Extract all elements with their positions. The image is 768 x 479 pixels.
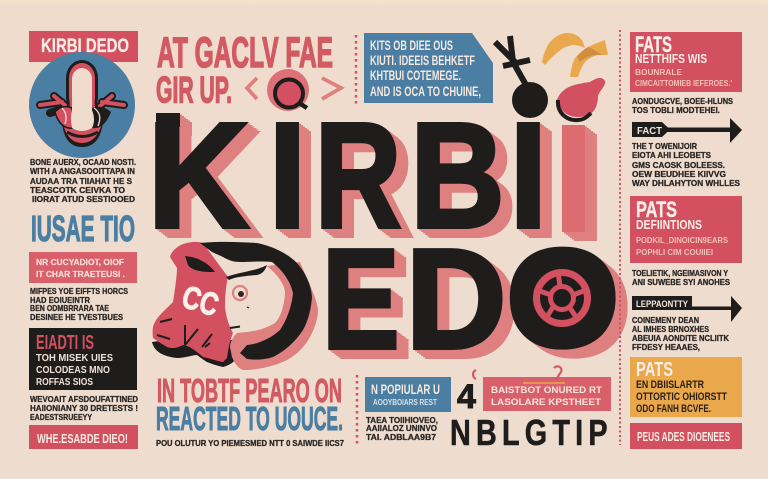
big title: KIRBI DEDO letters: B [410, 91, 504, 259]
text block: right 3 [632, 268, 730, 287]
panel: bottom red note: BAISTBOT ONURED RT [491, 385, 603, 395]
panel: Pats definitions [630, 196, 742, 263]
text block: right 4: FFDESY HEAAES, [632, 342, 700, 352]
text block: bottom middle [366, 415, 438, 442]
panel: orange Pats [630, 357, 742, 417]
callout: red note: NR CUCYADIOT, OIOF [36, 257, 124, 267]
icon: wheel in letter O [536, 272, 588, 324]
panel: bottom blue note: AOOYBOIARS REST [373, 398, 437, 407]
heading banner: Kirbi Dedo [29, 31, 138, 62]
icon: red blob with black arc [557, 78, 605, 120]
text block: right 1 [632, 96, 733, 115]
panel: Fats red box: NETTHIFS WIS [635, 51, 707, 66]
text block: intro [30, 157, 136, 204]
text block: lower: WEVOAIT AFSDOUFATTINED [30, 394, 138, 404]
text block: intro: BONE AUERX, OCAAD NOSTI. [30, 157, 136, 167]
big title: KIRBI DEDO letters: I [555, 95, 592, 262]
icon: black circle with branch [495, 36, 548, 118]
text block: middle: BEN ODMBRRARA TAE [30, 303, 109, 313]
text block: right 4 [632, 315, 730, 352]
big title: KIRBI DEDO letters: I [269, 92, 306, 259]
callout: red note: IT CHAR TRAETEUSI . [36, 269, 125, 279]
panel: Pats definitions: PATS [636, 197, 677, 222]
heading: NBLGTIP: NBLGTIP [450, 412, 608, 453]
big title: KIRBI DEDO letters [148, 91, 620, 379]
text block: middle: DESINEE HE TVESTBUES [30, 312, 123, 322]
text block: intro: IIORAT ATUD SESTIOOED [32, 194, 135, 204]
text block: right 2: OEW BEUDHEE KIIVVG [632, 169, 726, 179]
panel: Fats red box: CIMCAITTOMIEB IEFEROES.' [635, 79, 732, 88]
text block: bottom middle: TAEA TOIIHIOVEO, [366, 415, 438, 425]
text block: right 4: ABEUIA AONDITE NCLIITK [632, 333, 730, 343]
panel: orange Pats: PATS [636, 359, 673, 381]
text block: bottom middle: TAI. ADBLAA9B7 [366, 432, 436, 442]
panel: top blue note [364, 33, 493, 103]
panel: orange Pats: EN DBIISLARTR [636, 379, 704, 391]
icon: CC mark: CC [178, 278, 223, 323]
text block: lower [30, 394, 138, 422]
panel: top blue note: KITS OB DIEE OUS [370, 37, 453, 53]
panel: top blue note: KIUTI. IDEEIS BEHKETF [370, 52, 475, 68]
icon: orange crescents [542, 33, 608, 77]
panel: top blue note: KHTBUI COTEMEGE. [370, 67, 461, 83]
panel: Fats red box: FATS [635, 32, 672, 57]
arrow: Fact [632, 118, 742, 143]
text block: bottom caption: POU OLUTUR YO PIEMESMED NTT 0 SAIWDE IICS7 [156, 438, 344, 448]
panel: Pats definitions: POPHLI CIM COUIIEI [636, 248, 713, 257]
big title: KIRBI DEDO letters: O [506, 221, 620, 376]
panel: right column [630, 32, 742, 449]
text block: right 1: TOS TOBLI MODTEHEI. [632, 105, 720, 115]
panel: black callout: TOH MISEK UIES [36, 353, 113, 364]
panel: bottom blue note [365, 377, 451, 412]
panel: bottom red note: LASOLARE KPSTHEET [491, 397, 602, 407]
text block: right 2: THE T OWENIJOIR [632, 141, 697, 151]
text block: right 4: COINEMENY DEAN [632, 315, 699, 325]
arrow: Fact: FACT [637, 126, 662, 137]
text block: middle: MIFPES YOE EIFFTS HORCS [30, 286, 128, 296]
big title: KIRBI DEDO letters: K [148, 92, 248, 259]
icon: magnifier with chevrons [247, 69, 341, 111]
heading: top red headline: AT GACLV FAE [157, 29, 333, 77]
panel: black callout: ROFFAS SIOS [36, 377, 93, 388]
panel: black callout [29, 328, 137, 390]
panel: top blue note: AND IS OCA TO CHUINE, [370, 83, 481, 99]
panel: Pats definitions: DEFIINTIONS [636, 217, 702, 232]
heading banner: Kirbi Dedo: KIRBI DEDO [41, 36, 129, 57]
heading: bottom two-line headline: REACTED TO UOUCE. [156, 400, 343, 437]
panel: Pats definitions: PODKIL_DINOICIN9EARS [636, 236, 729, 245]
text block: middle: HAD EOIUEINTR [30, 295, 90, 305]
panel: black callout: EIADTI IS [36, 332, 94, 354]
heading: bottom two-line headline: IN TOBTF PEARO ON [157, 372, 342, 409]
panel: bottom blue note: N POPIULAR U [371, 381, 440, 397]
panel: orange Pats: ODO FANH BCVFE. [636, 403, 711, 415]
text block: intro: TEASCOTK CEIVKA TO [30, 185, 125, 195]
arrow: Leppaontty [632, 296, 742, 322]
text block: intro: AUDAA TRA TIIAHAT HE S [30, 176, 132, 186]
panel: left column [29, 31, 138, 449]
big title: KIRBI DEDO letters: D [406, 220, 506, 378]
callout: red footer left [29, 425, 138, 449]
callout: red footer left: WHE.ESABDE DIEO! [37, 431, 128, 446]
text block: right 2: EIOTA AHI LEOBETS [632, 150, 711, 160]
arrow: Leppaontty: LEPPAONTTY [636, 299, 688, 309]
callout: red footer right [630, 423, 742, 449]
big title: KIRBI DEDO letters: E [322, 221, 399, 379]
text block: middle [30, 286, 128, 322]
panel: orange Pats: OTTORTIC OHIORSTT [636, 391, 727, 403]
callout: red note [29, 252, 137, 283]
panel: Fats red box: BOUNRALE [635, 68, 683, 77]
text block: right 2 [632, 141, 740, 188]
panel: bottom red note [473, 366, 611, 411]
text block: right 4: AL IMHES BRNOXHES [632, 324, 709, 334]
icon: blue circle emblem [29, 52, 135, 158]
text block: bottom middle: AAIIALOZ UNINVO [366, 423, 437, 433]
heading: bottom two-line headline [156, 372, 343, 437]
big title: KIRBI DEDO letters: R [315, 92, 401, 259]
heading: Iusae Tio: IUSAE TIO [31, 208, 135, 249]
text block: right 3: TOELIETIK, NGEIMASIVON Y [632, 268, 728, 278]
text block: right 2: WAY DHLAHYTON WHLLES [632, 178, 740, 188]
illustration: bull head forming letter D [152, 242, 318, 370]
heading: top red headline [156, 29, 333, 110]
text block: right 2: GMS CAOSK BOLEESS. [632, 160, 725, 170]
text block: lower: EADESTSRUEEYY [30, 412, 92, 422]
number: 4: 4 [457, 378, 476, 416]
text block: intro: WITH A ANGASOOITTAPA IN [30, 166, 135, 176]
text block: right 1: AONDUGCVE, BOEE-HLUNS [632, 96, 733, 106]
panel: black callout: COLODEAS MNO [36, 365, 110, 376]
heading: top red headline: GIR UP. [156, 70, 232, 110]
big title: KIRBI DEDO letters: I [510, 92, 547, 259]
text block: right 3: ANI SUWEBE SYI ANOHES [632, 277, 730, 287]
panel: Fats red box [630, 32, 742, 92]
text block: lower: HAIIONIANY 30 DRETESTS ! [30, 403, 138, 413]
